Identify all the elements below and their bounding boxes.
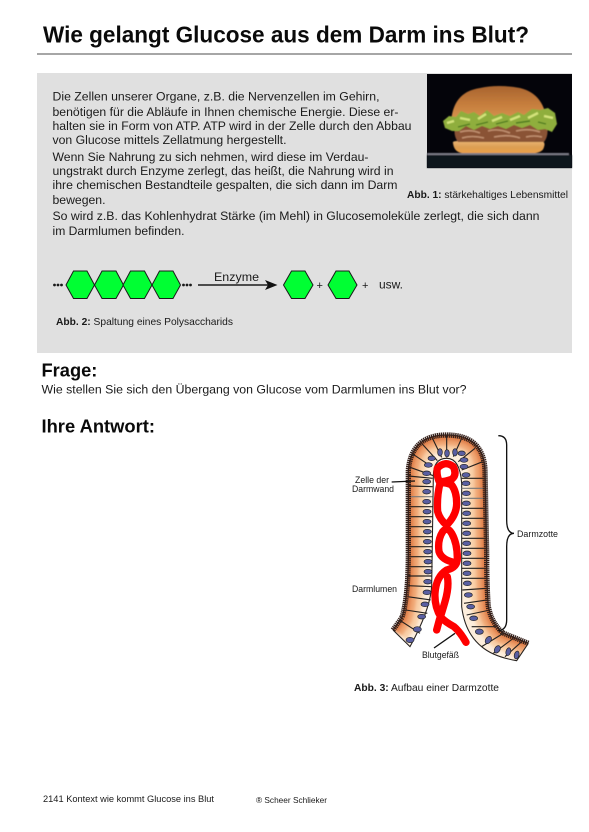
image: burger — [427, 74, 572, 168]
villus labels: Darmlumen — [352, 584, 397, 594]
intro text: halten sie in Form von ATP. ATP wird in der Zelle durch den Abbau — [52, 119, 412, 133]
grey cell walls — [408, 488, 486, 498]
glucose chain — [66, 271, 180, 298]
intro text: ihre chemischen Bestandteile gespalten, die sich dann im Darm — [52, 178, 398, 192]
arrow: enzyme — [198, 270, 278, 290]
diagram: polysaccharide cleavage: + — [316, 280, 323, 292]
nuclei — [406, 449, 520, 659]
villus labels: Blutgefäß — [422, 650, 459, 660]
footer — [43, 794, 327, 805]
panel: introduction — [37, 73, 572, 353]
caption: Abb. 3: Abb. 3: Aufbau einer Darmzotte — [354, 683, 499, 694]
footer: ® Scheer Schlieker — [256, 796, 327, 805]
villus labels — [352, 475, 558, 660]
footer: 2141 Kontext wie kommt Glucose ins Blut — [43, 794, 214, 804]
intro text: von Glucose mittels Zellatmung hergestellt. — [52, 133, 286, 147]
question: Wie stellen Sie sich den Übergang von Glucose vom Darmlumen ins Blut vor? — [42, 382, 467, 396]
villus labels: Darmwand — [352, 484, 394, 494]
diagram: intestinal villus — [392, 435, 528, 661]
intro text: im Darmlumen befinden. — [52, 224, 184, 238]
villus labels: Zelle der — [355, 475, 389, 485]
arrow: enzyme: Enzyme — [214, 270, 259, 284]
diagram: polysaccharide cleavage: usw. — [379, 278, 403, 292]
intro text: bewegen. — [52, 193, 106, 207]
brush border — [393, 435, 528, 643]
glucose products — [284, 271, 357, 298]
caption: Abb. 2: Abb. 2: Spaltung eines Polysaccharids — [56, 317, 233, 328]
diagram: polysaccharide cleavage: + — [362, 280, 368, 292]
intro text: Wenn Sie Nahrung zu sich nehmen, wird diese im Verdau- — [52, 150, 368, 164]
title: Wie gelangt Glucose aus dem Darm ins Blut? — [43, 22, 529, 48]
dots — [53, 284, 192, 286]
intro text: benötigen für die Abläufe in Ihnen chemische Energie. Diese er- — [52, 105, 398, 119]
heading: Frage: Frage: — [42, 360, 97, 380]
heading: Ihre Antwort: Ihre Antwort: — [42, 416, 155, 436]
epithelium — [393, 435, 528, 661]
bracket: Darmzotte — [498, 436, 514, 631]
intro text: Die Zellen unserer Organe, z.B. die Nervenzellen im Gehirn, — [52, 90, 380, 104]
intro text: ungstrakt durch Enzyme zerlegt, das heißt, die Nahrung wird in — [52, 164, 394, 178]
diagram: polysaccharide cleavage — [53, 270, 403, 298]
caption: Abb. 1: Abb. 1: stärkehaltiges Lebensmittel — [407, 190, 568, 201]
blood vessel — [435, 464, 466, 642]
leader lines — [392, 481, 455, 648]
cell walls — [393, 435, 528, 661]
intro text: So wird z.B. das Kohlenhydrat Stärke (im Mehl) in Glucosemoleküle zerlegt, die sich dann — [52, 209, 540, 223]
villus labels: Darmzotte — [517, 529, 558, 539]
intro text — [52, 90, 540, 238]
